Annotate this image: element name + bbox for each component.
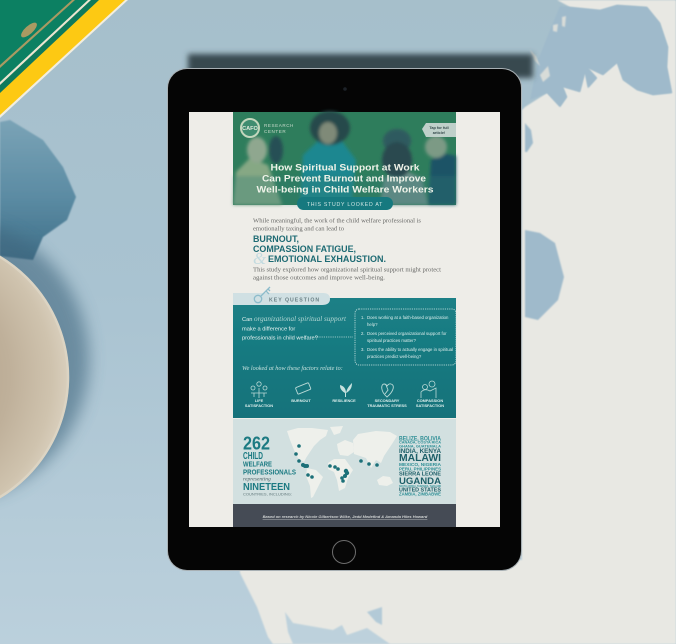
intro text block [253, 218, 441, 282]
logo: CAFO Research Center [241, 119, 294, 137]
pill: this study looked at: THIS STUDY LOOKED AT [307, 202, 383, 208]
icon: resilience sprout [340, 383, 352, 397]
key question tab [233, 287, 330, 305]
dotted box: three questions: 3. [361, 347, 365, 352]
stats text: WELFARE [243, 462, 272, 468]
country word cloud: MEXICO, NIGERIA [399, 462, 442, 468]
country word cloud: INDIA, KENYA [399, 448, 442, 455]
dotted box: three questions: 1. [361, 315, 365, 320]
country word cloud: ZAMBIA, ZIMBABWE [399, 492, 441, 496]
home button [332, 540, 356, 564]
header photo panel [233, 111, 456, 210]
dotted box: three questions: spiritual practices matter? [367, 338, 417, 343]
factor labels: TRAUMATIC STRESS [367, 403, 407, 408]
country word cloud: GHANA, GUATEMALA [399, 444, 441, 448]
ampersand icon: & [253, 249, 267, 268]
pill: this study looked at [297, 197, 393, 210]
book corner: green cover with yellow stripe [0, 0, 128, 118]
country word cloud [399, 436, 442, 496]
title: How Spiritual Support at Work [270, 162, 420, 172]
title: Well-being in Child Welfare Workers [256, 184, 434, 194]
footer bar: credits [233, 504, 456, 527]
intro text block: against those outcomes and improve well-being. [253, 276, 386, 282]
icon: compassion people [421, 381, 436, 398]
intro text block: COMPASSION FATIGUE, [253, 244, 356, 255]
camera [343, 87, 347, 91]
teal panel: key question [233, 287, 456, 418]
dotted box: three questions: 2. [361, 331, 365, 336]
map pins [294, 444, 379, 483]
plate shadow [0, 219, 89, 501]
dotted box: three questions [355, 309, 456, 365]
intro text block: BURNOUT, [253, 234, 299, 245]
stats text: NINETEEN [243, 481, 290, 493]
stats text: CHILD [243, 450, 263, 462]
intro text block: While meaningful, the work of the child welfare professional is [253, 218, 422, 224]
factor labels: COMPASSION [417, 398, 443, 403]
country word cloud: UNITED STATES [399, 488, 442, 494]
question text: make a difference for [242, 326, 295, 332]
dotted box: three questions: Does the ability to actually engage in spiritual [367, 347, 453, 352]
factor labels [245, 398, 444, 408]
tablet shadow [188, 54, 533, 78]
dotted box: three questions: help? [367, 322, 378, 327]
intro text block: This study explored how organizational spiritual support might protect [253, 268, 441, 274]
light panel: reach [233, 419, 456, 504]
icon: key [254, 287, 270, 303]
infographic [233, 111, 456, 527]
title: Can Prevent Burnout and Improve [262, 172, 426, 184]
intro text block: emotionally taxing and can lead to [253, 226, 344, 232]
button: tap for full article: article! [433, 131, 445, 135]
button: tap for full article: Tap for full [429, 126, 449, 130]
country word cloud: BELIZE, BOLIVIA [399, 436, 442, 442]
country word cloud: CANADA, COSTA RICA [399, 440, 442, 444]
country word cloud: UGANDA [399, 476, 441, 487]
factor labels: RESILIENCE [332, 398, 356, 403]
button: tap for full article [422, 123, 456, 137]
plate [0, 236, 69, 518]
country word cloud: PERU, PHILIPPINES [399, 466, 441, 472]
question text: professionals in child welfare? [242, 336, 318, 342]
subhead: We looked at how these factors relate to: [242, 365, 343, 372]
country word cloud: MALAWI [399, 453, 441, 464]
stats text: 262 [243, 434, 270, 454]
factor labels: LIFE [255, 398, 264, 403]
intro text block: EMOTIONAL EXHAUSTION. [268, 254, 386, 265]
icon: life satisfaction [251, 382, 267, 398]
logo: CAFO Research Center: RESEARCH [264, 123, 294, 128]
footer bar: credits: Based on research by Nicole Gilbertson Wilke, Jedd Medefind & Amanda Hiles Howard [263, 514, 428, 519]
dotted box: three questions: Does working at a faith-based organization [367, 315, 449, 320]
icon: heart [382, 384, 393, 397]
stats text: representing [243, 476, 271, 482]
question text [242, 315, 347, 342]
world map [287, 426, 397, 498]
dotted box: three questions: Does perceived organizational support for [367, 331, 447, 336]
factor labels: SATISFACTION [416, 403, 444, 408]
country word cloud: SOUTH AFRICA, TANZANIA, THAILAND [399, 484, 441, 488]
logo: CAFO Research Center: CENTER [264, 129, 286, 134]
stats text: PROFESSIONALS [243, 470, 296, 476]
question text: Can organizational spiritual support [242, 315, 347, 323]
tablet body [167, 68, 522, 571]
dotted box: three questions: practices predict well-being? [367, 354, 422, 359]
factor labels: SATISFACTION [245, 403, 273, 408]
logo: CAFO Research Center: CAFO [242, 126, 259, 132]
tablet screen [189, 112, 500, 527]
factor labels: SECONDARY [375, 398, 400, 403]
factor labels: BURNOUT [291, 398, 311, 403]
title [256, 162, 434, 194]
stats text [243, 434, 296, 496]
country word cloud: SIERRA LEONE [399, 472, 441, 478]
key question tab: KEY QUESTION [269, 298, 320, 304]
stats text: COUNTRIES, INCLUDING: [243, 492, 292, 496]
icon: burnout battery [295, 383, 311, 394]
